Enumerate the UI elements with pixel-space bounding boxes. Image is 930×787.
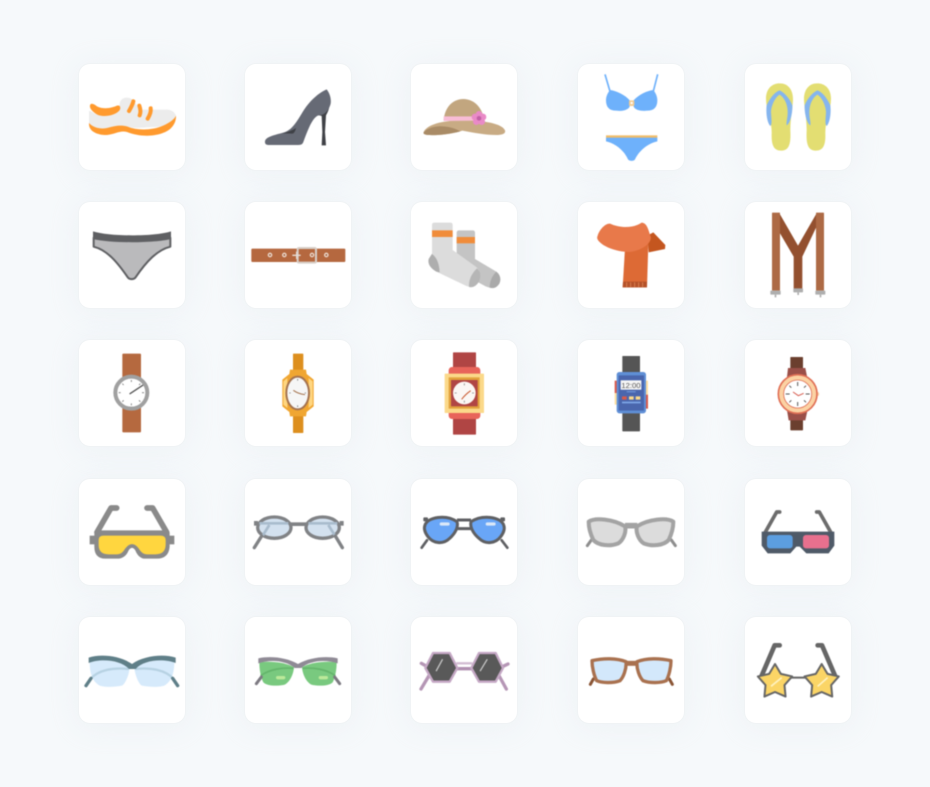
card: yellow goggles	[79, 479, 185, 585]
card: bikini	[578, 64, 684, 170]
card: green half-rim glasses	[245, 617, 351, 723]
card: pale blue half-rim glasses	[79, 617, 185, 723]
card: briefs	[79, 202, 185, 308]
card: rose watch	[745, 340, 851, 446]
card: 3D glasses	[745, 479, 851, 585]
card: hexagon sunglasses	[411, 617, 517, 723]
card: digital watch	[578, 340, 684, 446]
card: star sunglasses	[745, 617, 851, 723]
card: scarf	[578, 202, 684, 308]
card: leather wristwatch	[79, 340, 185, 446]
card: socks	[411, 202, 517, 308]
card: blue aviators	[411, 479, 517, 585]
card: flip flops	[745, 64, 851, 170]
card: suspenders	[745, 202, 851, 308]
card: round wire glasses	[245, 479, 351, 585]
card: high heel	[245, 64, 351, 170]
card: octagonal gold watch	[245, 340, 351, 446]
card: digital watch: 12:00	[621, 381, 641, 390]
card: grey cat-eye glasses	[578, 479, 684, 585]
card: belt	[245, 202, 351, 308]
card: square red watch	[411, 340, 517, 446]
card: sneaker	[79, 64, 185, 170]
card: brown glasses	[578, 617, 684, 723]
card: sun hat	[411, 64, 517, 170]
